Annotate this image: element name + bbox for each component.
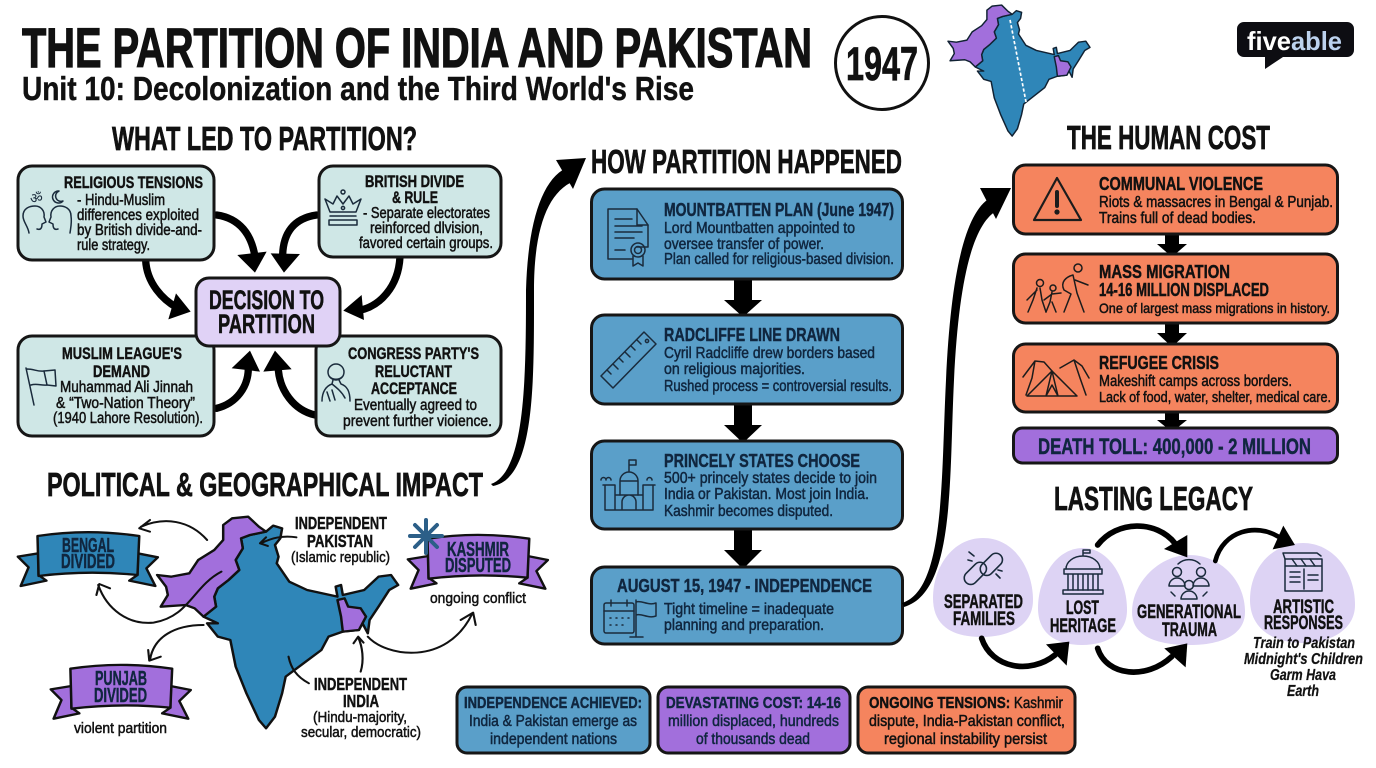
panel: congress party's acceptance: RELUCTANT	[375, 362, 452, 381]
ribbon: Kashmir disputed: DISPUTED	[445, 555, 511, 577]
summary box: devastating cost	[658, 687, 850, 753]
list: artistic works	[1244, 635, 1363, 700]
blob: generational trauma: TRAUMA	[1162, 620, 1217, 641]
panel: decision to partition: PARTITION	[218, 309, 315, 339]
summary box: ongoing tensions	[858, 687, 1075, 753]
icon: broken chain	[962, 551, 1005, 587]
label: independent Pakistan: (Islamic republic)	[291, 549, 390, 566]
blob: artistic responses: ARTISTIC	[1273, 597, 1334, 618]
heading: the human cost: THE HUMAN COST	[1067, 119, 1270, 156]
panel: religious tensions: differences exploited	[77, 207, 199, 224]
panel: princely states choose: Kashmir becomes disputed.	[664, 503, 833, 520]
fiveable logo: fiveable	[1247, 26, 1342, 56]
icon: ruler	[601, 332, 656, 388]
arrow: impact to how partition happened	[491, 158, 586, 486]
panel: congress party's acceptance: ACCEPTANCE	[371, 379, 457, 398]
label: independent India: (Hindu-majority,	[313, 709, 407, 726]
panel: mass migration	[1014, 254, 1338, 323]
summary box: ongoing tensions: regional instability persist	[884, 731, 1048, 748]
blob: separated families: SEPARATED	[944, 592, 1023, 613]
subtitle: Unit 10: Decolonization and the Third World's Rise	[22, 70, 694, 107]
panel: princely states choose: India or Pakistan. Most join India.	[664, 486, 869, 503]
panel: british divide and rule: BRITISH DIVIDE	[365, 172, 464, 191]
panel: communal violence: Riots & massacres in Bengal & Punjab.	[1099, 194, 1333, 211]
blob: generational trauma: GENERATIONAL	[1137, 602, 1241, 623]
panel: causes flow arrows	[146, 215, 400, 415]
blob: separated families: FAMILIES	[953, 609, 1015, 630]
year badge 1947: 1947	[846, 37, 918, 90]
summary box: independence achieved: independent nations	[490, 731, 617, 748]
label: independent India	[301, 674, 421, 741]
mini map of partitioned India	[948, 5, 1090, 136]
icon: refugee tents	[1023, 360, 1089, 396]
icon: crown	[325, 190, 361, 225]
icon: family walking	[1027, 264, 1088, 312]
legacy flow arrows	[982, 526, 1295, 672]
icon: palace	[601, 460, 655, 510]
panel: mass migration: 14-16 MILLION DISPLACED	[1099, 279, 1269, 300]
panel: religious tensions: - Hindu-Muslim	[77, 192, 165, 209]
icon: film clapperboard	[1283, 553, 1322, 591]
panel: congress party's acceptance: CONGRESS PARTY'S	[348, 344, 479, 363]
panel: refugee crisis: Lack of food, water, shelter, medical care.	[1099, 390, 1331, 406]
icon: connected people	[1169, 560, 1209, 599]
ribbon: Punjab divided: violent partition	[74, 720, 167, 737]
heading: political and geographical impact: POLITICAL & GEOGRAPHICAL IMPACT	[47, 466, 483, 503]
map of India and Pakistan	[157, 517, 398, 728]
panel: communal violence: Trains full of dead bodies.	[1099, 210, 1256, 227]
panel: refugee crisis: Makeshift camps across borders.	[1099, 373, 1292, 390]
icon: flag	[26, 368, 56, 405]
icon: religious symbols and two heads	[23, 191, 71, 233]
label: independent India: INDEPENDENT	[314, 674, 407, 694]
heading: what led to partition: WHAT LED TO PARTITION?	[112, 120, 417, 157]
ribbon: Kashmir disputed: KASHMIR	[447, 539, 509, 561]
panel: british divide and rule: & RULE	[392, 188, 438, 207]
fiveable logo	[1237, 22, 1354, 69]
panel: religious tensions: by British divide-and-	[77, 222, 202, 239]
panel: princely states choose	[592, 441, 902, 529]
summary box: devastating cost: of thousands dead	[696, 731, 810, 748]
panel: decision to partition: DECISION TO	[209, 285, 324, 315]
blob: separated families	[933, 538, 1033, 637]
panel: communal violence	[1014, 165, 1338, 234]
summary box: independence achieved: INDEPENDENCE ACHIEVED:	[464, 695, 642, 712]
ribbon: Kashmir disputed: ongoing conflict	[430, 590, 527, 607]
panel: Radcliffe line drawn	[592, 315, 902, 404]
blob: lost heritage: LOST	[1066, 598, 1099, 619]
panel: muslim league's demand: DEMAND	[93, 362, 150, 381]
panel: british divide and rule: - Separate electorates	[363, 205, 490, 222]
blob: artistic responses	[1250, 543, 1355, 643]
heading: how partition happened: HOW PARTITION HAPPENED	[591, 143, 902, 180]
panel: decision to partition	[196, 278, 340, 346]
panel: congress party's acceptance: prevent further vioience.	[343, 413, 492, 430]
summary box: independence achieved	[457, 687, 650, 753]
panel: Radcliffe line drawn: Rushed process = controversial results.	[664, 378, 892, 395]
icon: Gandhi	[322, 364, 350, 401]
panel: Mountbatten plan: MOUNTBATTEN PLAN (June 1947)	[664, 199, 894, 220]
icon: religious symbols and two heads: ॐ	[30, 191, 43, 207]
panel: communal violence: COMMUNAL VIOLENCE	[1099, 173, 1263, 194]
panel: muslim league's demand: MUSLIM LEAGUE'S	[62, 344, 182, 363]
panel: mass migration: One of largest mass migrations in history.	[1099, 300, 1330, 316]
panel: Mountbatten plan: Plan called for religious-based division.	[664, 251, 894, 268]
panel: refugee crisis: REFUGEE CRISIS	[1099, 352, 1219, 373]
panel: congress party's acceptance: Eventually agreed to	[354, 397, 477, 414]
label: independent India: INDIA	[343, 691, 379, 711]
panel: death toll	[1014, 428, 1338, 463]
panel: british divide and rule: favored certain groups.	[359, 235, 493, 252]
summary box: ongoing tensions: dispute, India-Pakistan conflict,	[869, 713, 1065, 730]
panel: August 15 1947 independence: planning and preparation.	[664, 617, 824, 634]
title: THE PARTITION OF INDIA AND PAKISTAN	[22, 16, 812, 79]
label: independent Pakistan	[291, 513, 390, 566]
panel: Radcliffe line drawn: Cyril Radcliffe drew borders based	[664, 345, 875, 362]
arrow: independence to human cost	[902, 188, 1011, 607]
timeline down arrows	[724, 278, 762, 569]
label: independent India: secular, democratic)	[301, 724, 421, 741]
panel: Radcliffe line drawn: on religious majorities.	[664, 361, 805, 378]
icon: Kashmir asterisk	[410, 520, 442, 553]
ribbon: Bengal divided: BENGAL	[62, 535, 114, 557]
list: artistic works: Garm Hava	[1270, 667, 1336, 684]
ribbon: Kashmir disputed	[408, 520, 548, 607]
blob: generational trauma	[1132, 555, 1245, 645]
ribbon: Bengal divided: DIVIDED	[61, 551, 115, 573]
panel: muslim league's demand	[18, 336, 214, 436]
panel: british divide and rule: reinforced dlvision,	[370, 220, 483, 237]
ribbon: Bengal divided	[18, 532, 158, 586]
heading: lasting legacy: LASTING LEGACY	[1054, 480, 1253, 517]
panel: Mountbatten plan	[592, 189, 902, 279]
panel: congress party's acceptance	[316, 336, 501, 436]
ribbon: Punjab divided: DIVIDED	[94, 685, 147, 707]
panel: muslim league's demand: & “Two-Nation Theory”	[56, 395, 195, 412]
panel: religious tensions: RELIGIOUS TENSIONS	[64, 173, 203, 192]
panel: muslim league's demand: (1940 Lahore Resolution).	[53, 410, 203, 427]
panel: Mountbatten plan: oversee transfer of power.	[664, 236, 824, 253]
panel: british divide and rule	[319, 166, 501, 257]
year badge 1947	[836, 16, 928, 110]
panel: Mountbatten plan: Lord Mountbatten appointed to	[664, 220, 855, 237]
blob: lost heritage	[1038, 548, 1127, 645]
summary box: devastating cost: million displaced, hundreds	[668, 713, 839, 730]
ribbon: Punjab divided: PUNJAB	[95, 668, 147, 690]
icon: domed monument	[1063, 550, 1103, 594]
panel: August 15 1947 independence: Tight timeline = inadequate	[664, 601, 834, 618]
label: independent Pakistan: INDEPENDENT	[295, 513, 387, 533]
summary box: independence achieved: India & Pakistan emerge as	[469, 713, 637, 730]
summary box: devastating cost: DEVASTATING COST: 14-16	[666, 695, 841, 712]
panel: August 15 1947 independence	[592, 567, 902, 644]
list: artistic works: Earth	[1287, 683, 1319, 700]
panel: religious tensions	[18, 166, 214, 260]
ribbon: Punjab divided	[51, 665, 191, 737]
panel: religious tensions: rule strategy.	[77, 237, 150, 254]
panel: August 15 1947 independence: AUGUST 15, 1947 - INDEPENDENCE	[617, 575, 872, 596]
label: independent Pakistan: PAKISTAN	[307, 531, 373, 551]
summary box: ongoing tensions: ONGOING TENSIONS: Kashmir	[869, 695, 1064, 712]
panel: muslim league's demand: Muhammad Ali Jinnah	[60, 379, 193, 396]
panel: Radcliffe line drawn: RADCLIFFE LINE DRAWN	[664, 324, 840, 345]
human cost down arrows	[1157, 233, 1187, 432]
panel: refugee crisis	[1014, 344, 1338, 412]
map callout arrows	[96, 520, 476, 683]
blob: lost heritage: HERITAGE	[1050, 616, 1116, 637]
icon: warning triangle	[1034, 178, 1081, 220]
icon: document with seal	[608, 209, 648, 266]
panel: princely states choose: PRINCELY STATES CHOOSE	[664, 450, 860, 471]
icon: calendar and flag	[604, 600, 656, 637]
panel: princely states choose: 500+ princely states decide to join	[664, 470, 877, 487]
panel: mass migration: MASS MIGRATION	[1099, 261, 1230, 282]
